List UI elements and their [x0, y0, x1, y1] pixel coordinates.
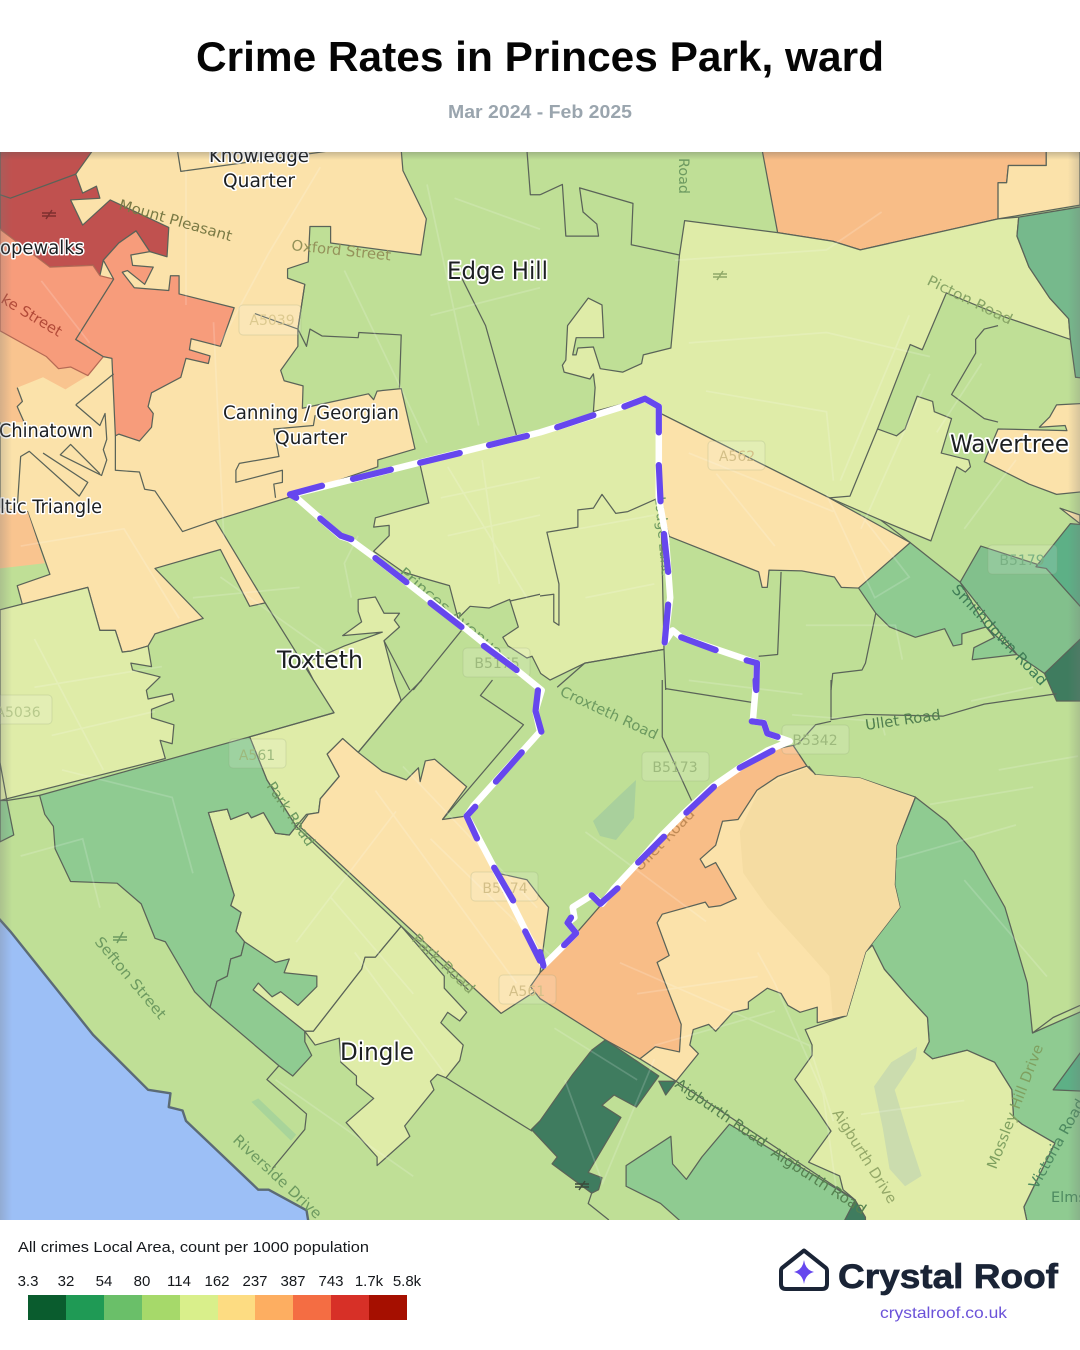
road names: Mossley Hill Drive — [985, 1042, 1047, 1171]
ward boundary purple dashes: north-west — [290, 436, 527, 670]
subtitle: date range: Mar 2024 - Feb 2025 — [448, 102, 632, 122]
legend values: 3.3 — [18, 1273, 38, 1290]
legend values — [18, 1273, 422, 1290]
road shield: A5036 — [0, 695, 52, 724]
icon: Crystal Roof house logo — [781, 1250, 827, 1289]
map areas: north-west quadrant — [0, 150, 664, 826]
legend values: 743 — [318, 1273, 344, 1290]
road names: Ullet Road — [631, 806, 698, 875]
legend colour bar — [28, 1295, 407, 1320]
legend heading: All crimes Local Area, count per 1000 population — [18, 1239, 369, 1256]
place labels: Chinatown — [0, 421, 93, 442]
title: Crime Rates in Princes Park, ward — [196, 33, 884, 80]
road shield: B5342 — [782, 725, 849, 754]
road shield: A5039: A5039 — [249, 313, 295, 329]
road shield: A561 north — [229, 739, 286, 768]
road names: Park Road — [408, 931, 478, 997]
legend values: 80 — [134, 1273, 150, 1290]
place labels: Toxteth — [276, 646, 363, 674]
place labels — [0, 146, 1069, 1066]
road shield: B5342: B5342 — [792, 733, 838, 749]
road names: Oxford Street — [291, 238, 392, 264]
map areas: north-east quadrant — [540, 150, 1080, 701]
road shield: A5039 — [239, 305, 301, 335]
legend values: 5.8k — [393, 1273, 422, 1290]
legend values: 114 — [167, 1273, 191, 1290]
faint street network — [21, 167, 1078, 1197]
road names: Picton Road — [924, 273, 1015, 328]
map edge shading — [0, 152, 1080, 1220]
road shield: A561 south — [499, 975, 556, 1004]
road names: Aigburth Road — [672, 1076, 769, 1151]
ward boundary purple dashes: north-east — [557, 399, 757, 690]
place labels: opewalks — [0, 238, 84, 259]
map base land — [0, 152, 1080, 1220]
road names: Sefton Street — [91, 934, 169, 1023]
road shield: B5173 — [642, 752, 709, 781]
road names: Mount Pleasant — [117, 197, 234, 245]
ward boundary purple dashes: south-west — [467, 690, 541, 961]
legend values: 54 — [96, 1273, 112, 1290]
legend values: 32 — [58, 1273, 74, 1290]
ward boundary: Princes Park — [290, 399, 790, 966]
ward boundary purple dashes: south-east — [540, 680, 778, 966]
place labels: ltic Triangle — [0, 497, 102, 518]
road names: Aigburth Road — [768, 1145, 869, 1218]
place labels: Knowledge — [209, 146, 309, 167]
road names: Park Road — [263, 779, 317, 850]
road shield: A562 — [708, 441, 765, 470]
road shield: A561 south: A561 — [509, 984, 545, 1000]
legend values: 162 — [204, 1273, 230, 1290]
road names — [0, 158, 1080, 1222]
road shield: A562: A562 — [719, 449, 755, 465]
road shield: A561 north: A561 — [239, 748, 275, 764]
road names: Smithdown Road — [948, 582, 1050, 689]
logo url: crystalroof.co.uk — [880, 1305, 1008, 1322]
road names: Croxteth Road — [557, 684, 660, 743]
ward boundary white casing — [293, 399, 790, 966]
road names: Ullet Road — [864, 708, 942, 734]
icon: railway stations — [42, 210, 727, 1190]
road shield: B5174: B5174 — [482, 881, 528, 897]
legend values: 387 — [280, 1273, 306, 1290]
road shield: B5175: B5175 — [474, 656, 520, 672]
legend scale — [18, 1273, 422, 1320]
road shield: B5179 — [988, 545, 1057, 574]
lake in Princes Park — [593, 780, 636, 840]
place labels: Dingle — [340, 1038, 414, 1066]
legend values: 237 — [242, 1273, 268, 1290]
place labels: Edge Hill — [447, 257, 548, 285]
road shield: B5174 — [471, 872, 538, 901]
legend values: 1.7k — [355, 1273, 384, 1290]
road names: Princes Avenue — [395, 565, 505, 661]
road shield: B5179: B5179 — [999, 553, 1045, 569]
place labels: Wavertree — [950, 430, 1069, 458]
road names: Aigburth Drive — [829, 1107, 899, 1207]
logo wordmark: Crystal Roof — [838, 1258, 1059, 1296]
place labels: Canning / Georgian — [223, 403, 399, 424]
road shield: B5175 — [463, 648, 530, 677]
place labels: Quarter — [223, 171, 295, 192]
road names: Riverside Drive — [229, 1132, 324, 1222]
map areas: south-west quadrant — [0, 680, 549, 1231]
road shield: B5173: B5173 — [652, 760, 698, 776]
road names: Road — [675, 158, 691, 194]
map areas: south-east quadrant — [530, 680, 1080, 1231]
road names: Lodge Lane — [651, 496, 674, 577]
place labels: Quarter — [275, 428, 347, 449]
